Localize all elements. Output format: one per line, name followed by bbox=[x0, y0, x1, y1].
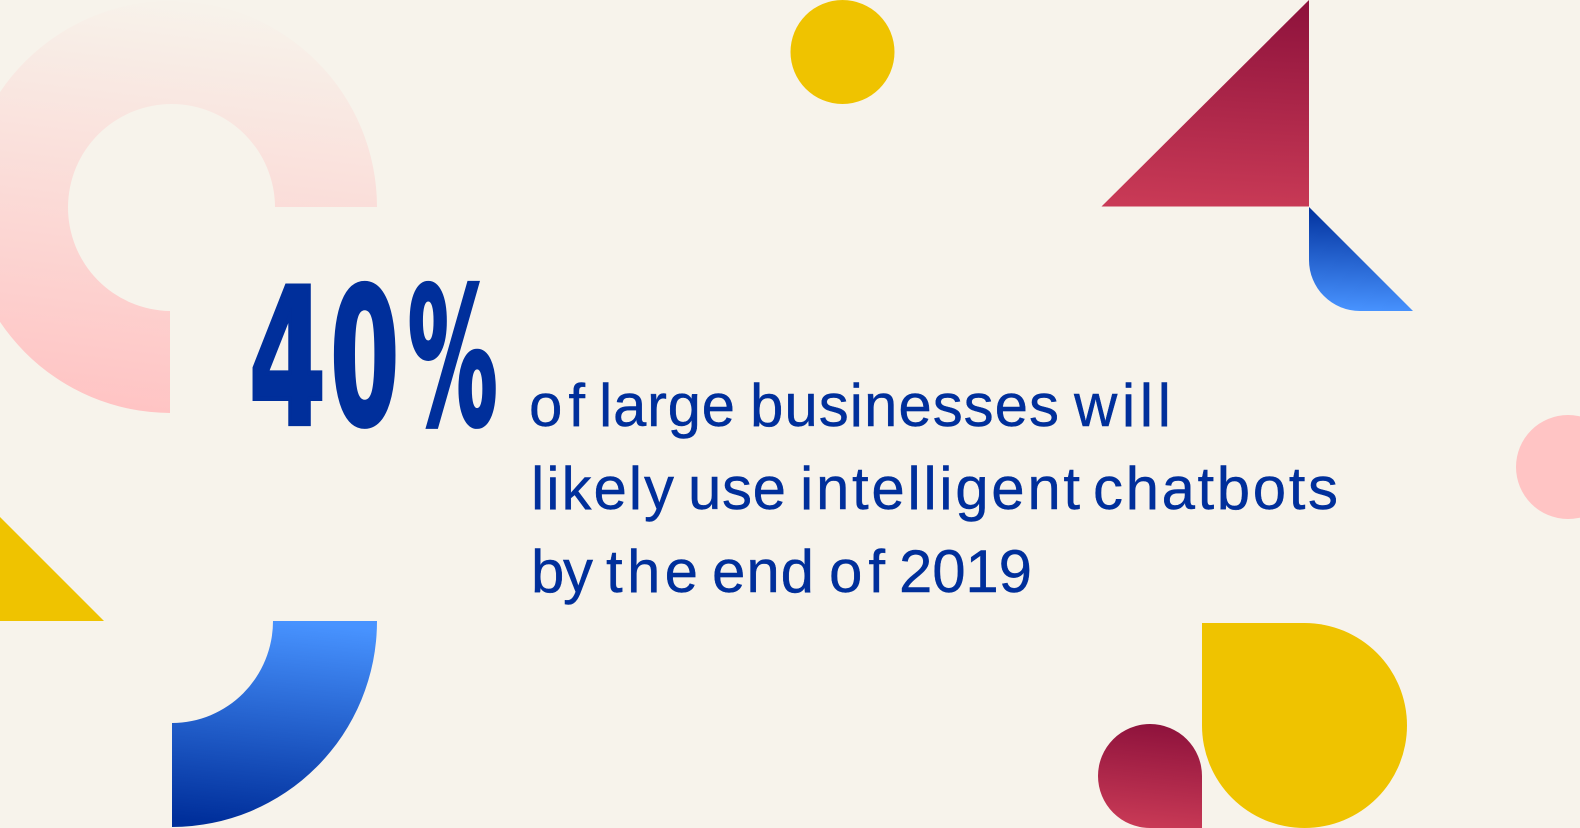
shape: pink circle right bbox=[1516, 415, 1580, 519]
big statistic 40%: 0 bbox=[330, 248, 399, 469]
shape: crimson triangle bbox=[1102, 0, 1309, 206]
statement text: of bbox=[829, 538, 885, 605]
shape: blue rounded triangle bbox=[1309, 207, 1413, 311]
big statistic 40%: 4 bbox=[249, 248, 326, 469]
statement text: chatbots bbox=[1093, 455, 1338, 522]
shape: yellow circle top bbox=[790, 0, 894, 104]
big statistic 40% bbox=[249, 248, 497, 469]
statement text: businesses bbox=[750, 372, 1059, 439]
shape: blue quarter ring bbox=[172, 621, 377, 827]
shape: crimson drop bbox=[1098, 724, 1202, 828]
shape: yellow triangle left bbox=[0, 517, 104, 621]
statement text: likely bbox=[531, 455, 674, 522]
statement text: intelligent bbox=[800, 455, 1080, 522]
statement text bbox=[529, 372, 1338, 605]
statement text: the bbox=[606, 538, 698, 605]
statement text: end bbox=[712, 538, 814, 605]
statement text: use bbox=[688, 455, 786, 522]
statement text: of bbox=[529, 372, 585, 439]
big statistic 40%: % bbox=[408, 248, 497, 468]
statement text: large bbox=[599, 372, 735, 439]
statement text: 2019 bbox=[899, 538, 1032, 605]
shape: pink three-quarter ring bbox=[0, 1, 377, 413]
statement text: by bbox=[531, 538, 593, 605]
shape: yellow drop bbox=[1202, 623, 1407, 828]
statement text: will bbox=[1073, 372, 1171, 439]
